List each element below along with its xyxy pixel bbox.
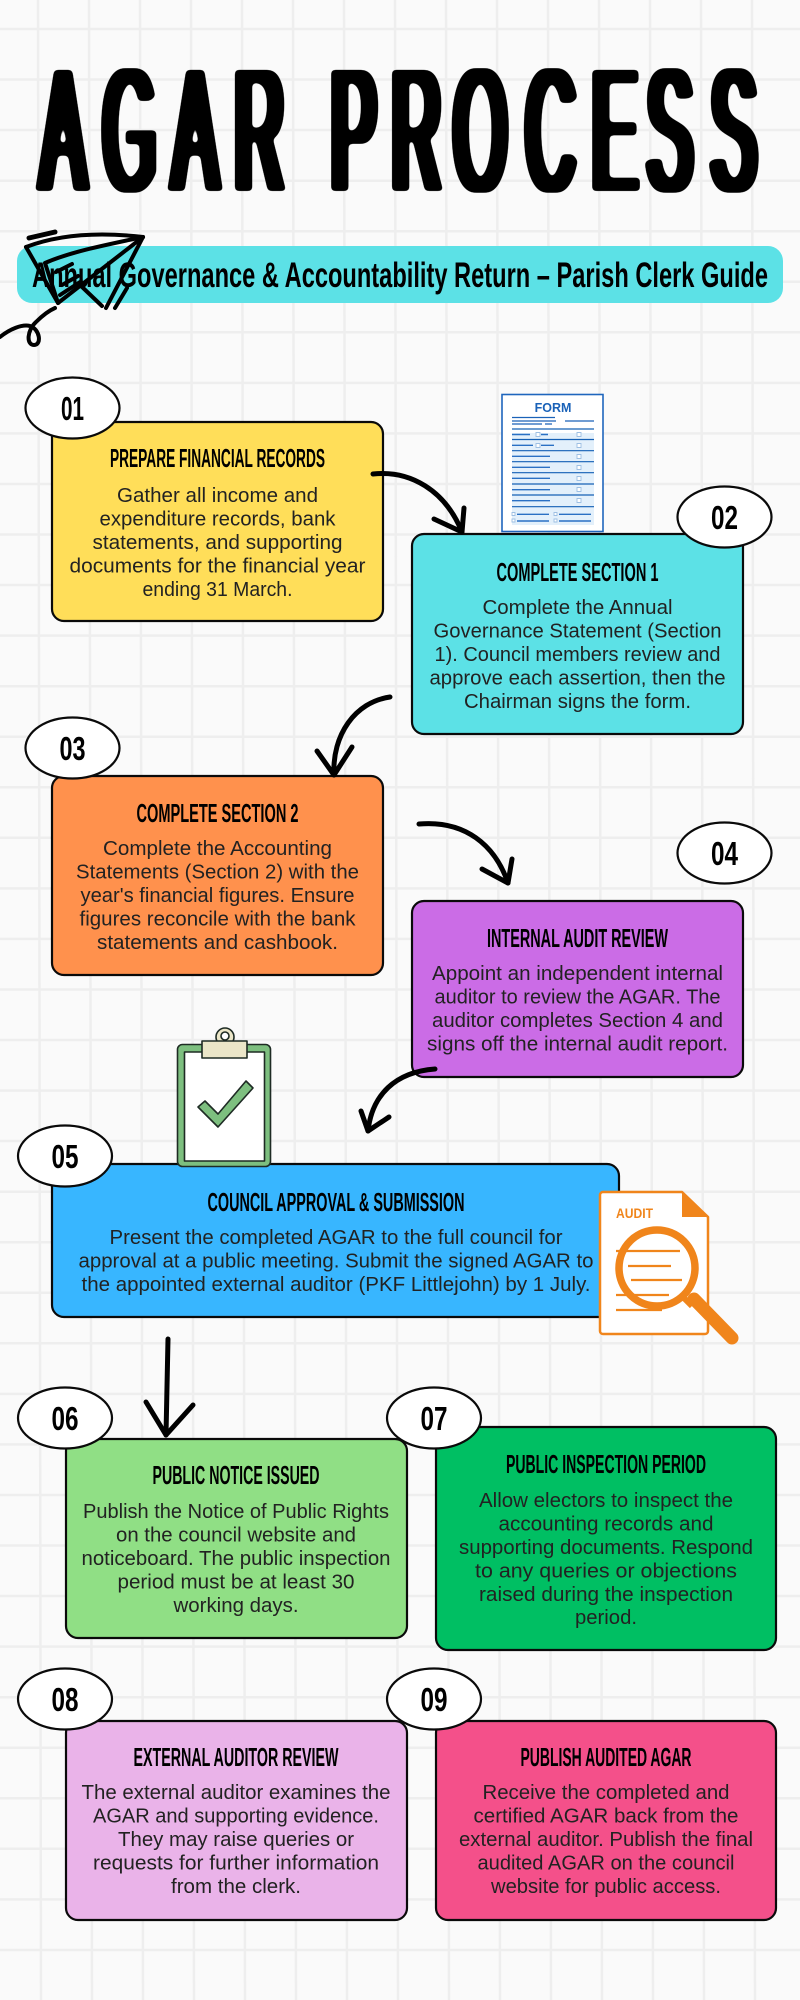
body text: from the clerk. bbox=[171, 1876, 301, 1898]
badge 03: 03 bbox=[60, 730, 86, 767]
body text: period. bbox=[575, 1607, 637, 1629]
title: AGAR PROCESS bbox=[40, 33, 756, 229]
badge 07 bbox=[387, 1388, 481, 1448]
icon: form document bbox=[502, 394, 603, 532]
body text: raised during the inspection bbox=[479, 1584, 733, 1606]
body text: audited AGAR on the council bbox=[478, 1852, 734, 1874]
badge 07: 07 bbox=[420, 1400, 448, 1437]
badge 05 bbox=[18, 1126, 112, 1186]
body text: Allow electors to inspect the bbox=[479, 1490, 733, 1512]
body text bbox=[427, 963, 728, 1056]
badge 01: 01 bbox=[61, 390, 84, 427]
icon: clipboard with check mark bbox=[178, 1028, 270, 1166]
heading: PUBLIC NOTICE ISSUED bbox=[152, 1460, 320, 1490]
icon: paper plane bbox=[0, 232, 143, 345]
body text: auditor completes Section 4 and bbox=[432, 1010, 723, 1032]
body text: statements, and supporting bbox=[92, 532, 342, 554]
body text: on the council website and bbox=[116, 1524, 356, 1546]
panel: step 02 complete section 1 bbox=[412, 486, 772, 734]
body text: statements and cashbook. bbox=[97, 932, 338, 954]
badge 09: 09 bbox=[420, 1681, 448, 1718]
body text: noticeboard. The public inspection bbox=[82, 1548, 390, 1570]
body text: ending 31 March. bbox=[142, 579, 292, 601]
body text: AGAR and supporting evidence. bbox=[93, 1806, 379, 1828]
badge 09 bbox=[387, 1668, 481, 1730]
body text bbox=[70, 485, 366, 601]
badge 06 bbox=[18, 1388, 112, 1448]
body text: Receive the completed and bbox=[482, 1782, 730, 1804]
body text bbox=[430, 597, 726, 713]
body text: 1). Council members review and bbox=[434, 644, 720, 666]
body text: website for public access. bbox=[490, 1876, 721, 1898]
badge 04 bbox=[678, 822, 772, 884]
arrow: step 1 to step 2 bbox=[373, 473, 464, 532]
body text: certified AGAR back from the bbox=[474, 1806, 738, 1828]
body text: Complete the Annual bbox=[482, 597, 672, 619]
panel: step 05 council approval and submission bbox=[18, 1126, 619, 1317]
body text: Complete the Accounting bbox=[103, 838, 332, 860]
panel: step 09 publish audited agar bbox=[387, 1668, 776, 1920]
heading: COMPLETE SECTION 1 bbox=[496, 557, 658, 587]
badge 03 bbox=[26, 718, 120, 778]
body text: period must be at least 30 bbox=[118, 1572, 354, 1594]
panel: step 06 public notice issued bbox=[18, 1388, 407, 1638]
body text: They may raise queries or bbox=[118, 1829, 354, 1851]
panel: step 01 prepare financial records bbox=[26, 378, 383, 621]
body text: the appointed external auditor (PKF Littlejohn) by 1 July. bbox=[82, 1274, 590, 1296]
badge 02 bbox=[678, 486, 772, 548]
body text: approve each assertion, then the bbox=[430, 668, 726, 690]
body text: working days. bbox=[172, 1595, 298, 1617]
badge 04: 04 bbox=[711, 835, 738, 872]
badge 08 bbox=[18, 1668, 112, 1730]
arrow: step 2 to step 3 bbox=[317, 697, 390, 775]
badge 06: 06 bbox=[52, 1400, 78, 1437]
body text: The external auditor examines the bbox=[82, 1782, 391, 1804]
arrow: step 3 to step 4 bbox=[419, 824, 512, 883]
body text: external auditor. Publish the final bbox=[459, 1829, 753, 1851]
body text: Chairman signs the form. bbox=[464, 691, 691, 713]
body text: Present the completed AGAR to the full council for bbox=[110, 1227, 563, 1249]
body text bbox=[76, 838, 359, 954]
body text: signs off the internal audit report. bbox=[427, 1034, 728, 1056]
panel: step 04 internal audit review bbox=[412, 901, 743, 1077]
body text: accounting records and bbox=[498, 1514, 714, 1536]
badge 02: 02 bbox=[711, 499, 738, 536]
heading: PREPARE FINANCIAL RECORDS bbox=[110, 443, 325, 473]
panel: step 08 external auditor review bbox=[18, 1668, 407, 1920]
body text: Publish the Notice of Public Rights bbox=[83, 1501, 389, 1523]
panel: step 03 complete section 2 bbox=[26, 718, 383, 975]
body text: auditor to review the AGAR. The bbox=[434, 986, 720, 1008]
body text bbox=[459, 1490, 753, 1629]
body text bbox=[82, 1501, 390, 1617]
body text: Governance Statement (Section bbox=[434, 620, 722, 642]
arrow: step 4 to step 5 bbox=[361, 1069, 435, 1131]
body text: supporting documents. Respond bbox=[459, 1537, 753, 1559]
body text: documents for the financial year bbox=[70, 556, 366, 578]
heading: COUNCIL APPROVAL & SUBMISSION bbox=[208, 1187, 464, 1217]
body text: Statements (Section 2) with the bbox=[76, 862, 359, 884]
body text: expenditure records, bank bbox=[100, 508, 337, 530]
body text bbox=[459, 1782, 753, 1898]
body text: approval at a public meeting. Submit the signed AGAR to bbox=[78, 1250, 594, 1272]
icon: audit document with magnifying glass: AUDIT bbox=[616, 1205, 653, 1221]
body text: requests for further information bbox=[93, 1852, 379, 1874]
body text: figures reconcile with the bank bbox=[80, 908, 357, 930]
body text: Appoint an independent internal bbox=[432, 963, 723, 985]
subtitle banner bbox=[17, 246, 783, 303]
body text: Gather all income and bbox=[117, 485, 318, 507]
badge 05: 05 bbox=[52, 1138, 78, 1175]
icon: form document: FORM bbox=[535, 401, 571, 415]
panel: step 07 public inspection period bbox=[387, 1388, 776, 1650]
badge 01 bbox=[26, 378, 120, 438]
badge 08: 08 bbox=[52, 1681, 78, 1718]
icon: audit document with magnifying glass bbox=[600, 1192, 732, 1338]
heading: COMPLETE SECTION 2 bbox=[136, 798, 298, 828]
body text: to any queries or objections bbox=[475, 1560, 737, 1582]
body text bbox=[78, 1227, 594, 1296]
arrow: step 5 to step 6 bbox=[146, 1339, 193, 1435]
body text bbox=[82, 1782, 391, 1898]
heading: EXTERNAL AUDITOR REVIEW bbox=[134, 1742, 339, 1772]
body text: year's financial figures. Ensure bbox=[80, 885, 354, 907]
